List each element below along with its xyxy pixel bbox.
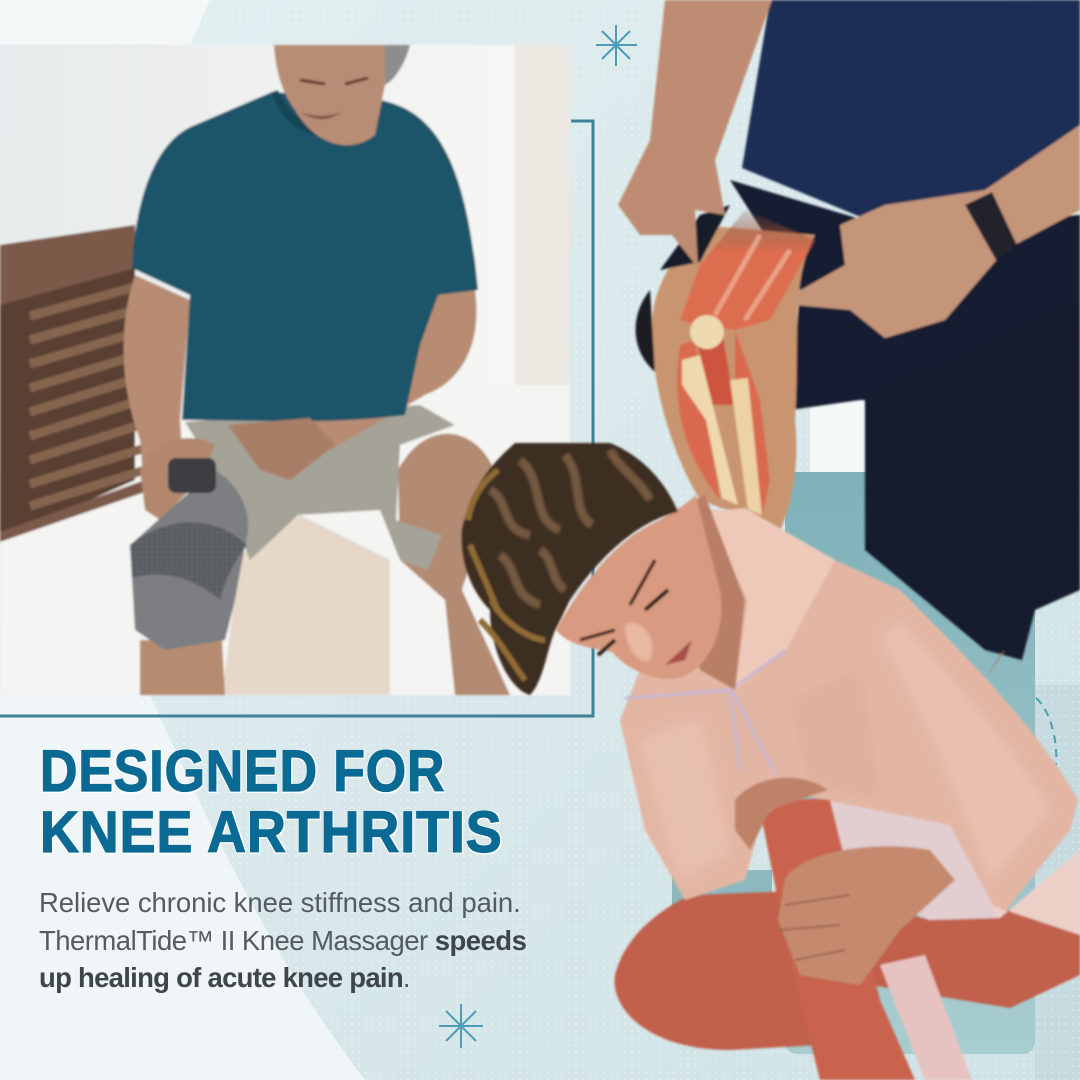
sparkle icon bottom (439, 1004, 483, 1048)
heading line two: KNEE ARTHRITIS (40, 800, 503, 865)
wooden cabinet (0, 225, 145, 542)
front lower leg (140, 640, 225, 695)
left arm and hand (618, 0, 772, 268)
knee anatomy overlay (677, 210, 815, 518)
photo: man with knee massager (0, 45, 570, 695)
teal block behind subjects (785, 472, 1035, 1054)
body text: up healing of acute knee pain. (39, 962, 410, 993)
heading line one: DESIGNED FOR (40, 739, 445, 804)
man with knee anatomy (618, 0, 1080, 680)
head (274, 45, 408, 145)
hoodie (620, 510, 1078, 918)
hair (462, 443, 678, 695)
sparkle icon top (596, 25, 637, 66)
near shin (762, 799, 915, 1080)
shirt (132, 92, 478, 421)
neck and face (675, 495, 745, 690)
pink legging light area (825, 800, 1000, 920)
frame outline (0, 121, 593, 716)
far leg (615, 890, 1080, 1050)
left arm (124, 275, 190, 500)
knee (652, 225, 815, 530)
body text (39, 887, 526, 993)
right hand and forearm (792, 125, 1080, 338)
shorts (185, 405, 455, 570)
hands (228, 418, 335, 480)
body text: ThermalTide™ II Knee Massager speeds (39, 924, 526, 956)
wristband (965, 192, 1017, 260)
knee brace (130, 458, 248, 650)
back leg (398, 434, 510, 695)
shoe (820, 1050, 855, 1080)
body text: Relieve chronic knee stiffness and pain. (39, 887, 521, 918)
wooden box seat (222, 515, 390, 695)
dashed arc (1036, 698, 1056, 765)
right arm (305, 290, 477, 450)
heading (40, 739, 503, 865)
woman crouching (462, 443, 1080, 1080)
hands (735, 778, 828, 850)
